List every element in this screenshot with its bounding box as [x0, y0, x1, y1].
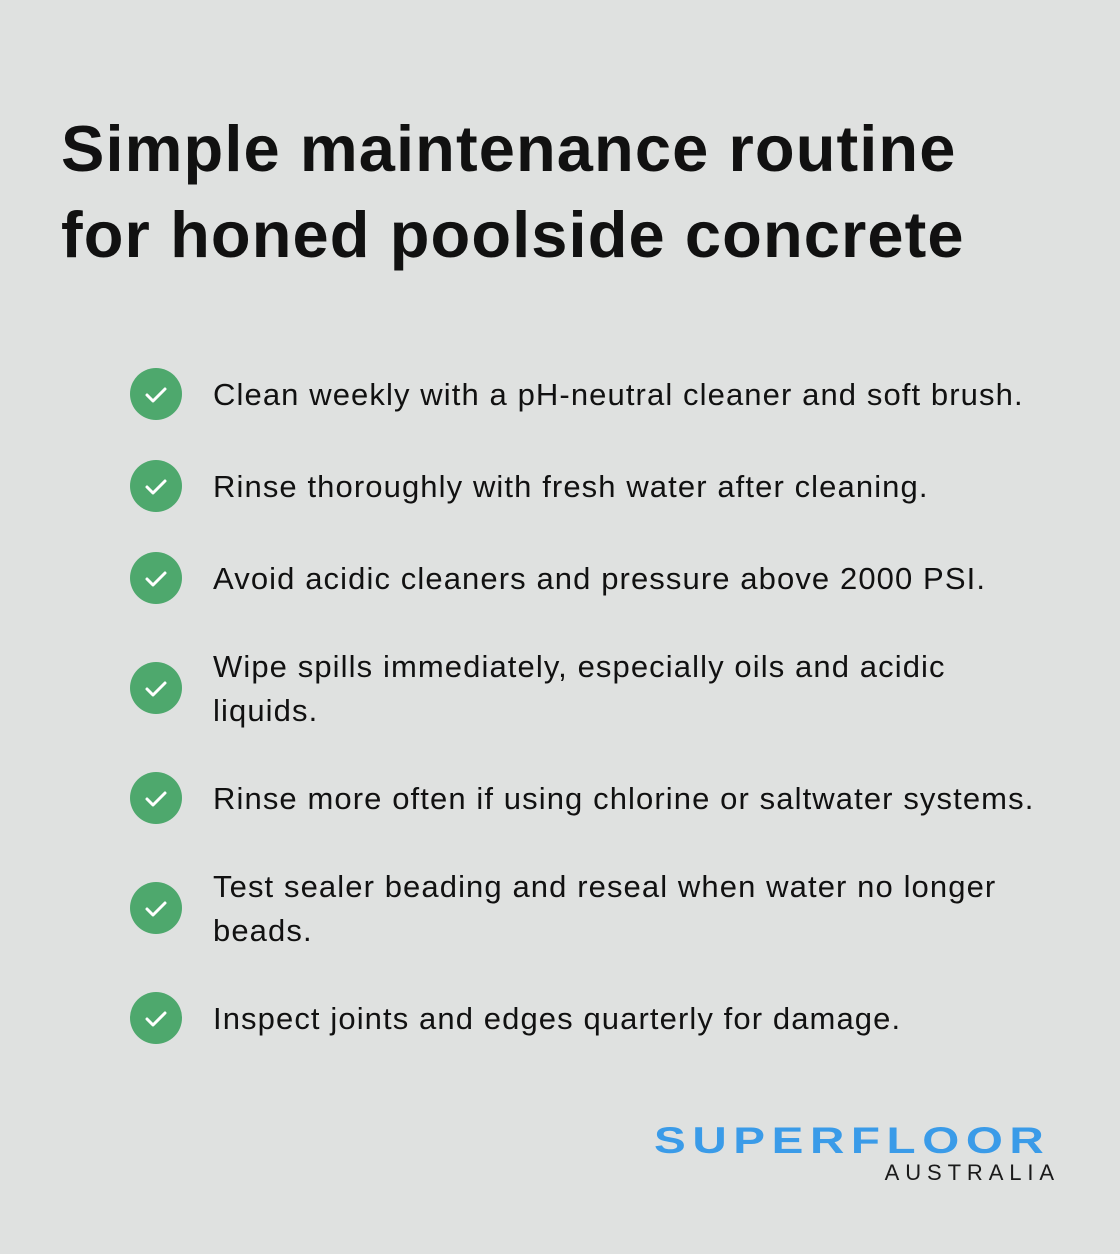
item 6: [130, 869, 996, 948]
item 1: Clean weekly with a pH-neutral cleaner and soft brush.: [213, 377, 1024, 412]
item 2: Rinse thoroughly with fresh water after cleaning.: [213, 469, 929, 504]
logo: SUPERFLOOR: [654, 1120, 1050, 1162]
item 5: Rinse more often if using chlorine or saltwater systems.: [213, 781, 1034, 816]
item 6: beads.: [213, 913, 313, 948]
item 7: [130, 992, 901, 1044]
logo: AUSTRALIA: [885, 1160, 1060, 1185]
title: for honed poolside concrete: [61, 198, 965, 271]
item 3: Avoid acidic cleaners and pressure above 2000 PSI.: [213, 561, 986, 596]
item 5: [130, 772, 1034, 824]
title: Simple maintenance routine: [61, 112, 956, 185]
item 4: liquids.: [213, 693, 318, 728]
item 3: [130, 552, 986, 604]
item 4: [130, 649, 946, 728]
item 1: [130, 368, 1024, 420]
item 6: Test sealer beading and reseal when water no longer: [213, 869, 996, 904]
title: [61, 112, 965, 271]
item 4: Wipe spills immediately, especially oils and acidic: [213, 649, 946, 684]
item 2: [130, 460, 929, 512]
item 7: Inspect joints and edges quarterly for damage.: [213, 1001, 901, 1036]
logo: [654, 1120, 1060, 1185]
